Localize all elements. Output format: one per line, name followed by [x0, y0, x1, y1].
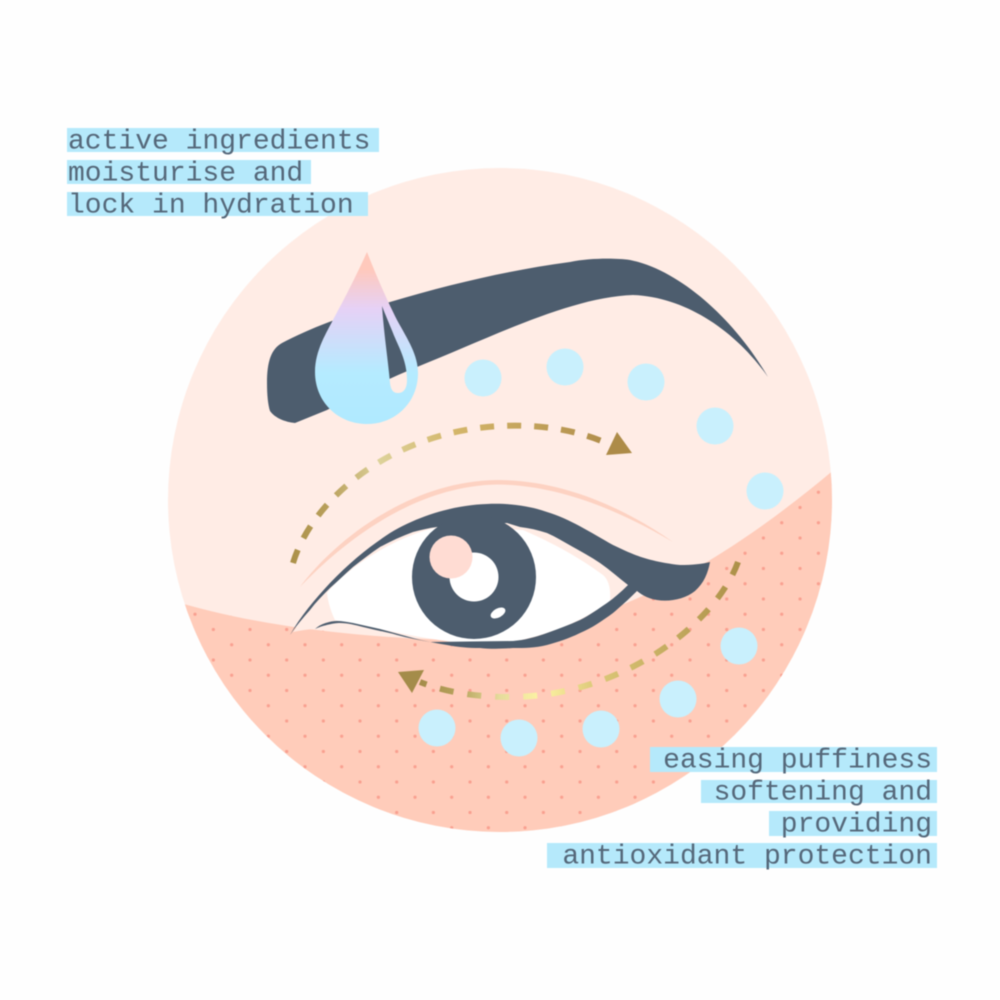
lower peach dotted region [184, 472, 832, 832]
lower dashed arrow [398, 562, 738, 697]
eyeliner and wing [290, 504, 710, 649]
lower arrowhead [398, 670, 424, 693]
sclera [327, 527, 610, 644]
upper treatment dots [464, 348, 784, 510]
caption: hydration: moisturise and [68, 158, 303, 190]
skin circle [160, 168, 850, 850]
eye [290, 504, 710, 649]
brow crease line [300, 480, 673, 587]
water drop [315, 252, 418, 424]
eye inner skin [293, 513, 630, 642]
caption: puffiness [547, 746, 937, 872]
caption: puffiness: easing puffiness [663, 746, 932, 776]
lower treatment dots [418, 628, 758, 756]
caption: puffiness: softening and [714, 778, 932, 808]
caption: puffiness: antioxidant protection [562, 842, 932, 872]
upper dashed arrow [293, 426, 632, 563]
upper arrowhead [606, 432, 632, 455]
white highlight [450, 552, 498, 602]
iris [412, 515, 536, 639]
caption: hydration: active ingredients [68, 126, 370, 158]
caption: hydration [67, 126, 379, 222]
pink highlight [430, 536, 472, 578]
caption: hydration: lock in hydration [68, 190, 354, 222]
eyebrow [267, 259, 768, 423]
caption: puffiness: providing [781, 810, 932, 840]
small highlight [489, 605, 507, 621]
